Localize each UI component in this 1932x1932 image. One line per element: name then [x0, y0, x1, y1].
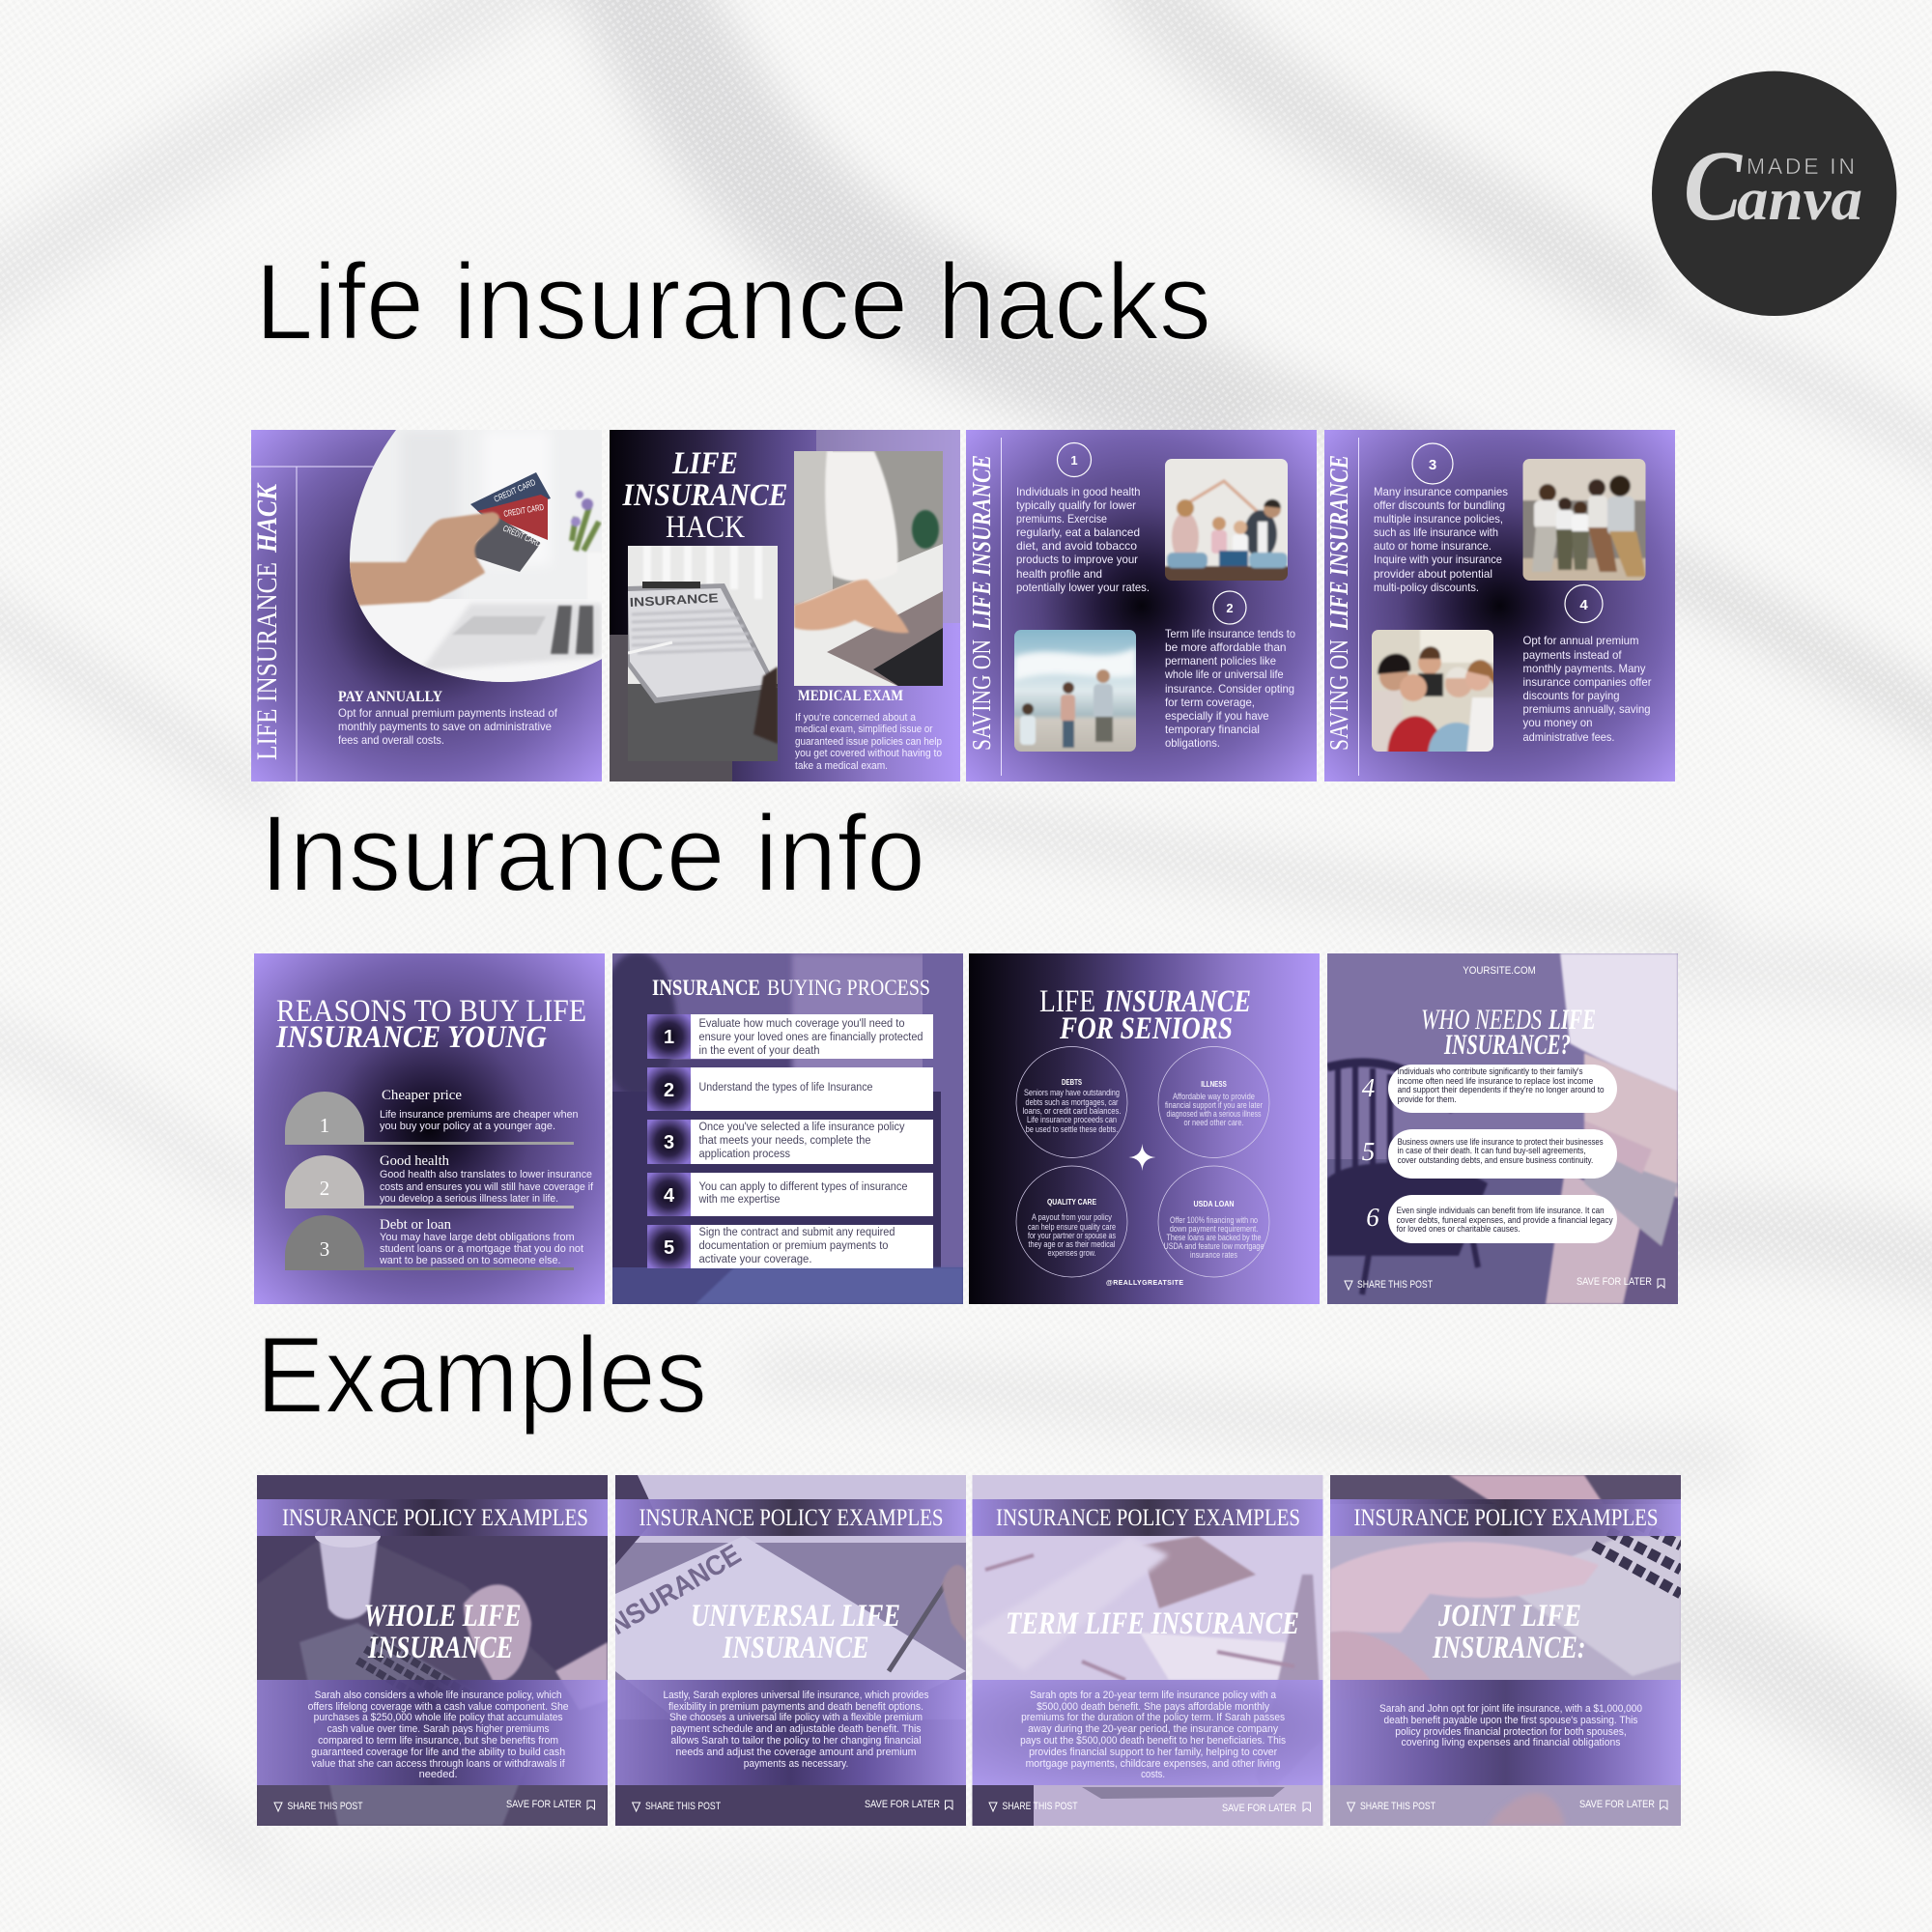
- item 5: 5: [1362, 1137, 1375, 1166]
- share and save row: [1345, 1276, 1664, 1291]
- step 4: You can apply to different types of insurance: [699, 1181, 908, 1193]
- text block: mortgage payments, childcare expenses, and other living: [1026, 1758, 1281, 1770]
- text: tip 1: [1016, 485, 1150, 594]
- circle: illness: Affordable way to provide: [1173, 1092, 1255, 1101]
- item 6: Even single individuals can benefit from life insurance. It can: [1397, 1206, 1605, 1216]
- text: tip 3: [1374, 485, 1508, 594]
- reason 1: Life insurance premiums are cheaper when: [380, 1109, 578, 1121]
- photo: bright desk with laptop: [972, 1475, 1323, 1826]
- item 5: [1362, 1129, 1617, 1179]
- panel: saving on life insurance 1 and 2: [966, 430, 1317, 781]
- item 5: Business owners use life insurance to protect their businesses: [1398, 1137, 1604, 1148]
- number 1: 1: [1070, 453, 1078, 468]
- step 1: 1: [664, 1027, 674, 1048]
- photo: hand holding credit cards: CREDIT CARD: [501, 524, 543, 549]
- badge: made in Canva: MADE IN: [1747, 154, 1855, 179]
- panel: pay annually: [251, 430, 604, 781]
- text: tip 1: regularly, eat a balanced: [1016, 526, 1140, 539]
- step 4: with me expertise: [698, 1194, 781, 1206]
- title: [1039, 984, 1251, 1046]
- title: HACK: [666, 510, 745, 545]
- text: tip 3: multi-policy discounts.: [1374, 581, 1479, 594]
- share and save row: SAVE FOR LATER: [1579, 1799, 1655, 1810]
- subtitle: [1432, 1599, 1586, 1665]
- text: medical exam: medical exam, simplified issue or: [795, 724, 933, 735]
- text block: away during the 20-year period, the insurance company: [1028, 1723, 1279, 1735]
- text: tip 4: [1522, 634, 1652, 744]
- share and save row: [633, 1799, 952, 1812]
- share and save row: [274, 1799, 595, 1812]
- panel: saving on life insurance 3 and 4: [1324, 430, 1675, 781]
- reason 3: [285, 1215, 583, 1270]
- vertical title: SAVING ON: [1324, 639, 1353, 751]
- item 5: in case of their death. It can fund buy-sell agreements,: [1398, 1146, 1586, 1156]
- circle: debts: Seniors may have outstanding: [1024, 1088, 1120, 1097]
- banner: [1330, 1499, 1681, 1536]
- step 2: [647, 1067, 933, 1111]
- circle: quality care: expenses grow.: [1047, 1248, 1095, 1258]
- circle: USDA loan: These loans are backed by the: [1167, 1233, 1262, 1242]
- step 2: 2: [664, 1080, 674, 1101]
- subtitle: INSURANCE: [367, 1631, 513, 1665]
- item 4: and support their dependents if they're no longer around to: [1398, 1085, 1605, 1095]
- share and save row: SHARE THIS POST: [1003, 1801, 1078, 1812]
- reason 1: Cheaper price: [382, 1088, 462, 1103]
- item 4: Individuals who contribute significantly to their family's: [1398, 1066, 1583, 1077]
- photo: family on the beach: [1014, 630, 1136, 752]
- text block: purchases a $250,000 whole life policy that accumulates: [314, 1712, 563, 1723]
- reason 3: want to be passed on to someone else.: [379, 1255, 560, 1266]
- banner: INSURANCE POLICY EXAMPLES: [1354, 1505, 1658, 1531]
- photo: insurance clipboard: INSURANCE: [629, 590, 719, 610]
- title: INSURANCE: [652, 976, 760, 1000]
- text block: needs and adjust the coverage amount and premium: [676, 1747, 916, 1758]
- title: [275, 994, 586, 1055]
- vertical title: [1324, 455, 1353, 751]
- circle: quality care: A payout from your policy: [1032, 1212, 1112, 1222]
- photo: insurance document and pen: [598, 1475, 966, 1826]
- subtitle: [691, 1599, 900, 1665]
- subtitle: INSURANCE: [722, 1631, 869, 1665]
- item 5: cover outstanding debts, and ensure business continuity.: [1398, 1155, 1593, 1166]
- reason 1: you buy your policy at a younger age.: [380, 1121, 555, 1132]
- circle: USDA loan: insurance rates: [1190, 1250, 1237, 1260]
- banner: INSURANCE POLICY EXAMPLES: [996, 1505, 1300, 1531]
- text: tip 1: health profile and: [1016, 567, 1102, 581]
- step 3: Once you've selected a life insurance policy: [699, 1122, 905, 1133]
- step 3: application process: [699, 1149, 790, 1160]
- photo: hands typing on laptop: [1330, 1475, 1681, 1826]
- panel: reasons to buy life insurance young: [254, 953, 605, 1304]
- text: tip 2: obligations.: [1165, 736, 1220, 750]
- text: tip 1: products to improve your: [1016, 553, 1138, 566]
- text block: death benefit payable upon the first spouse's passing. This: [1383, 1715, 1638, 1726]
- text block: payments as necessary.: [744, 1758, 848, 1770]
- heading: Insurance info: Insurance info: [260, 793, 925, 914]
- reason 2: Good health: [380, 1153, 449, 1169]
- title: [652, 976, 930, 1000]
- text: tip 3: auto or home insurance.: [1374, 539, 1492, 553]
- vertical title: SAVING ON: [967, 639, 996, 751]
- panel: term life insurance: [972, 1475, 1323, 1826]
- subtitle: INSURANCE:: [1432, 1631, 1586, 1665]
- step 5: Sign the contract and submit any required: [699, 1227, 895, 1238]
- photo: hand holding credit cards: [343, 430, 604, 686]
- title: BUYING PROCESS: [767, 976, 930, 1000]
- panel: whole life insurance: [257, 1475, 608, 1826]
- step 1: [647, 1014, 933, 1059]
- circle: debts: loans, or credit card balances.: [1022, 1106, 1121, 1116]
- reason 2: costs and ensures you will still have coverage if: [380, 1181, 594, 1193]
- text block: premiums for the duration of the policy term. If Sarah passes: [1021, 1712, 1286, 1723]
- vertical title: LIFE INSURANCE: [251, 562, 283, 760]
- number 2: [1213, 591, 1246, 624]
- panel: universal life insurance: [598, 1475, 966, 1826]
- text block: allows Sarah to tailor the policy to her changing financial: [670, 1735, 922, 1747]
- step 3: that meets your needs, complete the: [699, 1135, 871, 1147]
- site label: YOURSITE.COM: [1463, 965, 1536, 977]
- text: pay annually: [338, 689, 558, 747]
- text: tip 3: multiple insurance policies,: [1374, 512, 1503, 526]
- share and save row: SHARE THIS POST: [1357, 1279, 1433, 1291]
- share and save row: SAVE FOR LATER: [1577, 1276, 1652, 1288]
- text: pay annually: Opt for annual premium payments instead of: [338, 706, 558, 720]
- text: tip 2: for term coverage,: [1165, 696, 1255, 709]
- text: tip 4: premiums annually, saving: [1522, 702, 1650, 716]
- photo: family under roof of hands: [1165, 459, 1288, 581]
- item 4: 4: [1362, 1073, 1375, 1102]
- text: tip 2: be more affordable than: [1165, 640, 1287, 654]
- circle: quality care: they age or as their medical: [1028, 1239, 1115, 1249]
- subtitle: WHOLE LIFE: [363, 1599, 522, 1634]
- title: INSURANCE YOUNG: [275, 1020, 547, 1055]
- number 3: 3: [1429, 457, 1436, 473]
- vertical title: LIFE INSURANCE: [1324, 455, 1353, 631]
- text: tip 4: insurance companies offer: [1522, 675, 1652, 689]
- number 4: [1565, 585, 1603, 622]
- number 1: [1057, 442, 1092, 477]
- vertical title: HACK: [251, 482, 283, 554]
- handle: @REALLYGREATSITE: [1106, 1280, 1183, 1287]
- circle: quality care: can help ensure quality care: [1028, 1222, 1116, 1232]
- icon: sparkle star: [1128, 1144, 1155, 1171]
- item 6: 6: [1366, 1203, 1379, 1232]
- banner: [972, 1499, 1323, 1536]
- step 4: 4: [664, 1185, 675, 1207]
- title: [1421, 1004, 1596, 1061]
- photo: laptop and coffee cup: [257, 1475, 608, 1826]
- heading: Life insurance hacks: Life insurance hacks: [255, 242, 1211, 362]
- text block: $500,000 death benefit. She pays affordable monthly: [1037, 1701, 1270, 1713]
- panel: life insurance for seniors: [969, 953, 1320, 1304]
- text block: payment schedule and an adjustable death benefit. This: [670, 1723, 922, 1735]
- circle: illness: or need other care.: [1184, 1118, 1244, 1127]
- text block: [972, 1680, 1323, 1785]
- step 5: 5: [664, 1237, 674, 1259]
- vertical title: [967, 455, 996, 751]
- share and save row: SHARE THIS POST: [288, 1801, 363, 1812]
- text block: [615, 1680, 966, 1785]
- subtitle: UNIVERSAL LIFE: [691, 1599, 900, 1634]
- text block: needed.: [419, 1769, 458, 1780]
- circle: USDA loan: [1158, 1166, 1269, 1277]
- circle: illness: ILLNESS: [1201, 1080, 1227, 1089]
- text: tip 4: you money on: [1522, 716, 1592, 729]
- text: tip 2: Term life insurance tends to: [1165, 627, 1295, 640]
- text block: covering living expenses and financial obligations: [1401, 1737, 1621, 1748]
- share and save row: [989, 1801, 1310, 1814]
- share and save row: SAVE FOR LATER: [506, 1799, 582, 1810]
- circle: USDA loan: down payment requirement.: [1170, 1224, 1258, 1234]
- text: tip 2: permanent policies like: [1165, 654, 1276, 668]
- text: tip 1: premiums. Exercise: [1016, 512, 1107, 526]
- text: medical exam: take a medical exam.: [795, 760, 888, 772]
- text: tip 2: whole life or universal life: [1164, 668, 1284, 681]
- number 3: [1412, 443, 1453, 484]
- text block: value that she can access through loans or withdrawals if: [312, 1758, 565, 1770]
- panel: insurance buying process: [599, 952, 963, 1304]
- reason 2: Good health also translates to lower insurance: [380, 1169, 592, 1180]
- text: tip 2: temporary financial: [1165, 723, 1260, 736]
- text: tip 4: monthly payments. Many: [1522, 662, 1646, 675]
- circle: USDA loan: USDA LOAN: [1194, 1200, 1235, 1208]
- title: WHO NEEDS: [1421, 1004, 1542, 1036]
- circle: USDA loan: USDA and feature low mortgage: [1163, 1241, 1264, 1251]
- number 4: 4: [1579, 597, 1588, 613]
- photo: house with pool: [599, 952, 963, 1304]
- panel: who needs life insurance: [1327, 953, 1678, 1304]
- text: tip 4: discounts for paying: [1522, 689, 1619, 702]
- text: tip 3: offer discounts for bundling: [1374, 498, 1505, 512]
- reason 3: 3: [320, 1237, 329, 1261]
- text block: Sarah opts for a 20-year term life insurance policy with a: [1030, 1690, 1277, 1701]
- photo: hand holding credit cards: CREDIT CARD: [493, 477, 537, 504]
- photo: woman with laptop on chair: [1327, 953, 1678, 1304]
- reason 3: Debt or loan: [380, 1217, 451, 1233]
- text block: pays out the $500,000 death benefit to her beneficiaries. This: [1020, 1735, 1287, 1747]
- text block: compared to term life insurance, but she benefits from: [318, 1735, 558, 1747]
- photo: hand holding credit cards: CREDIT CARD: [503, 502, 545, 519]
- text block: offers lifelong coverage with a cash value component. She: [308, 1701, 569, 1713]
- heading: Examples: Examples: [256, 1315, 707, 1435]
- text block: provides financial support to her family, helping to cover: [1029, 1747, 1277, 1758]
- circle: illness: diagnosed with a serious illness: [1167, 1109, 1262, 1119]
- reason 3: You may have large debt obligations from: [380, 1232, 575, 1243]
- share and save row: [1348, 1799, 1667, 1812]
- text: tip 1: potentially lower your rates.: [1016, 581, 1150, 594]
- text block: policy provides financial protection for both spouses,: [1395, 1726, 1627, 1738]
- step 1: ensure your loved ones are financially protected: [699, 1032, 923, 1043]
- number 2: 2: [1226, 601, 1234, 615]
- reason 2: [285, 1153, 594, 1208]
- reason 2: 2: [320, 1177, 329, 1200]
- circle: debts: be used to settle these debts.: [1026, 1124, 1118, 1134]
- reason 2: you develop a serious illness later in life.: [380, 1193, 558, 1205]
- step 1: in the event of your death: [699, 1045, 819, 1057]
- badge: made in Canva: anva: [1737, 167, 1862, 233]
- text: tip 2: [1164, 627, 1295, 750]
- item 6: for loved ones or charitable causes.: [1397, 1224, 1520, 1235]
- text block: Sarah and John opt for joint life insurance, with a $1,000,000: [1379, 1703, 1642, 1715]
- photo: insurance clipboard: [628, 546, 778, 761]
- reason 1: [285, 1088, 578, 1145]
- text block: Lastly, Sarah explores universal life insurance, which provides: [663, 1690, 929, 1701]
- reason 3: student loans or a mortgage that you do not: [380, 1243, 583, 1255]
- text: medical exam: If you're concerned about a: [795, 712, 917, 724]
- text: medical exam: guaranteed issue policies can help: [795, 736, 942, 748]
- text: tip 3: provider about potential: [1374, 567, 1492, 581]
- step 3: 3: [664, 1132, 674, 1153]
- title: REASONS TO BUY LIFE: [276, 994, 586, 1029]
- circle: USDA loan: Offer 100% financing with no: [1170, 1215, 1258, 1225]
- step 4: [647, 1173, 933, 1216]
- share and save row: SHARE THIS POST: [645, 1801, 721, 1812]
- text: pay annually: fees and overall costs.: [338, 733, 444, 747]
- title: INSURANCE: [622, 478, 788, 513]
- circle: debts: [1016, 1047, 1127, 1157]
- text: tip 4: payments instead of: [1522, 648, 1622, 662]
- circle: debts: debts such as mortgages, car: [1026, 1097, 1119, 1107]
- photo: hand on laptop: [794, 451, 943, 686]
- step 5: documentation or premium payments to: [699, 1240, 889, 1252]
- share and save row: SAVE FOR LATER: [1222, 1803, 1296, 1814]
- circle: debts: Life insurance proceeds can: [1027, 1115, 1117, 1124]
- badge: made in Canva: [1652, 71, 1896, 316]
- text: tip 2: insurance. Consider opting: [1165, 682, 1294, 696]
- text: medical exam: you get covered without having to: [795, 748, 942, 759]
- title: INSURANCE: [1103, 984, 1251, 1019]
- text: pay annually: PAY ANNUALLY: [338, 689, 442, 705]
- circle: illness: financial support if you are later: [1165, 1100, 1263, 1110]
- item 6: [1366, 1195, 1617, 1243]
- panel: life insurance hack: [610, 430, 960, 781]
- circle: illness: [1158, 1047, 1269, 1157]
- text block: [257, 1680, 608, 1785]
- subtitle: JOINT LIFE: [1437, 1599, 1581, 1634]
- item 4: income often need life insurance to replace lost income: [1398, 1076, 1593, 1087]
- circle: quality care: QUALITY CARE: [1047, 1198, 1097, 1207]
- banner: INSURANCE POLICY EXAMPLES: [639, 1505, 943, 1531]
- text: medical exam: MEDICAL EXAM: [798, 688, 903, 704]
- text block: She chooses a universal life policy with a flexible premium: [669, 1712, 923, 1723]
- share and save row: SAVE FOR LATER: [865, 1799, 940, 1810]
- photo: family on a sofa: [1522, 459, 1646, 581]
- text block: costs.: [1141, 1769, 1165, 1780]
- banner: [257, 1499, 608, 1536]
- step 3: [647, 1120, 933, 1164]
- text block: guaranteed coverage for life and the ability to build cash: [311, 1747, 565, 1758]
- text: tip 3: such as life insurance with: [1374, 526, 1498, 539]
- step 2: Understand the types of life Insurance: [699, 1082, 873, 1094]
- title: [622, 446, 788, 545]
- item 6: cover debts, funeral expenses, and provide a financial legacy: [1397, 1215, 1613, 1226]
- step 5: activate your coverage.: [699, 1254, 811, 1265]
- text: tip 1: typically qualify for lower: [1016, 498, 1136, 512]
- circle: quality care: for your partner or spouse as: [1028, 1231, 1116, 1240]
- title: LIFE: [1548, 1004, 1596, 1036]
- banner: INSURANCE POLICY EXAMPLES: [282, 1505, 588, 1531]
- item 4: [1362, 1065, 1617, 1113]
- subtitle: TERM LIFE INSURANCE: [1006, 1606, 1299, 1641]
- banner: [615, 1499, 966, 1536]
- text: tip 2: especially if you have: [1165, 709, 1269, 723]
- text: pay annually: monthly payments to save on administrative: [338, 720, 552, 733]
- text: tip 4: Opt for annual premium: [1522, 634, 1638, 647]
- subtitle: [363, 1599, 522, 1665]
- badge: made in Canva: C: [1684, 130, 1743, 242]
- text: medical exam: [795, 688, 942, 772]
- text: tip 4: administrative fees.: [1522, 730, 1615, 744]
- title: FOR SENIORS: [1059, 1011, 1233, 1046]
- step 5: [647, 1225, 933, 1268]
- text: tip 1: diet, and avoid tobacco: [1016, 539, 1137, 553]
- step 1: Evaluate how much coverage you'll need to: [699, 1018, 904, 1030]
- circle: debts: DEBTS: [1062, 1078, 1083, 1087]
- item 4: provide for them.: [1398, 1094, 1457, 1105]
- title: INSURANCE?: [1443, 1029, 1571, 1061]
- share and save row: SHARE THIS POST: [1360, 1801, 1435, 1812]
- text block: cash value over time. Sarah pays higher premiums: [327, 1723, 550, 1735]
- circle: quality care: [1016, 1166, 1127, 1277]
- text block: Sarah also considers a whole life insurance policy, which: [315, 1690, 562, 1701]
- text: tip 1: Individuals in good health: [1016, 485, 1140, 498]
- text: tip 3: Inquire with your insurance: [1374, 553, 1502, 566]
- panel: joint life insurance: [1330, 1475, 1681, 1826]
- title: LIFE: [1039, 984, 1095, 1019]
- text: tip 3: Many insurance companies: [1374, 485, 1508, 498]
- photo: smiling extended family: [1372, 630, 1493, 752]
- photo: insurance document and pen: INSURANCE: [598, 1539, 747, 1645]
- text block: flexibility in premium payments and death benefit options.: [668, 1701, 923, 1713]
- text block: [1330, 1680, 1681, 1785]
- vertical title: LIFE INSURANCE: [967, 455, 996, 631]
- reason 1: 1: [320, 1114, 329, 1137]
- title: LIFE: [671, 446, 738, 481]
